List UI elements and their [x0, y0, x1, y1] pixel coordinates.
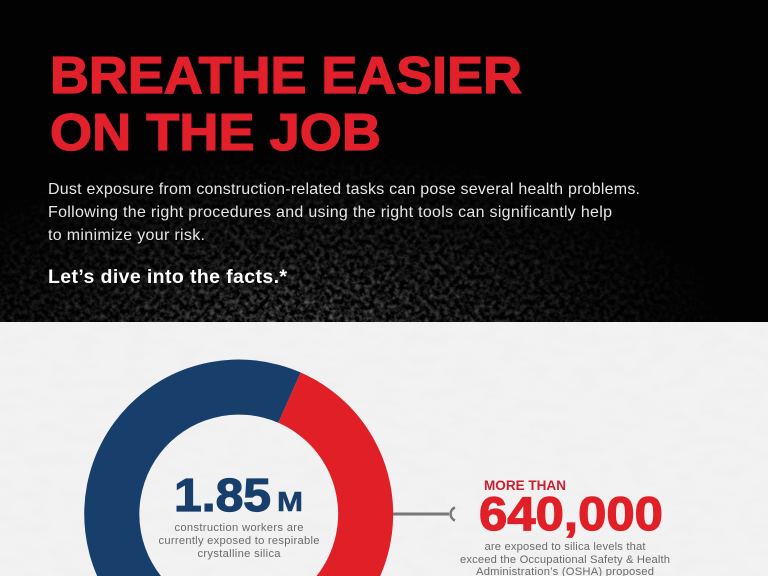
panel: statistics background — [0, 322, 768, 576]
intro text: Following the right procedures and using the right tools can significantly help — [48, 204, 612, 221]
statistic description — [460, 541, 670, 576]
center description: crystalline silica — [198, 548, 281, 560]
center description — [158, 522, 320, 560]
center statistic: 1.85M: 1.85 — [174, 469, 271, 521]
center statistic: 1.85M — [174, 469, 303, 521]
statistic description: are exposed to silica levels that — [484, 541, 646, 553]
panel: header background — [0, 0, 768, 322]
connector arrow — [393, 508, 455, 520]
donut segment: navy — [84, 360, 301, 576]
donut segment: red — [278, 372, 393, 576]
center description: currently exposed to respirable — [158, 535, 320, 547]
statistic label: more than: MORE THAN — [484, 478, 566, 493]
call to action: Let’s dive into the facts.* — [48, 266, 287, 288]
center statistic: 1.85M: M — [277, 486, 303, 517]
center description: construction workers are — [174, 522, 304, 534]
statistic: 640,000: 640,000 — [479, 487, 663, 540]
statistic description: exceed the Occupational Safety & Health — [460, 554, 670, 566]
title: ON THE JOB — [50, 103, 381, 161]
title: BREATHE EASIER — [50, 46, 522, 104]
intro text — [48, 181, 640, 244]
intro text: Dust exposure from construction-related tasks can pose several health problems. — [48, 181, 640, 198]
donut chart — [84, 360, 393, 576]
title — [50, 46, 522, 161]
intro text: to minimize your risk. — [48, 227, 205, 244]
